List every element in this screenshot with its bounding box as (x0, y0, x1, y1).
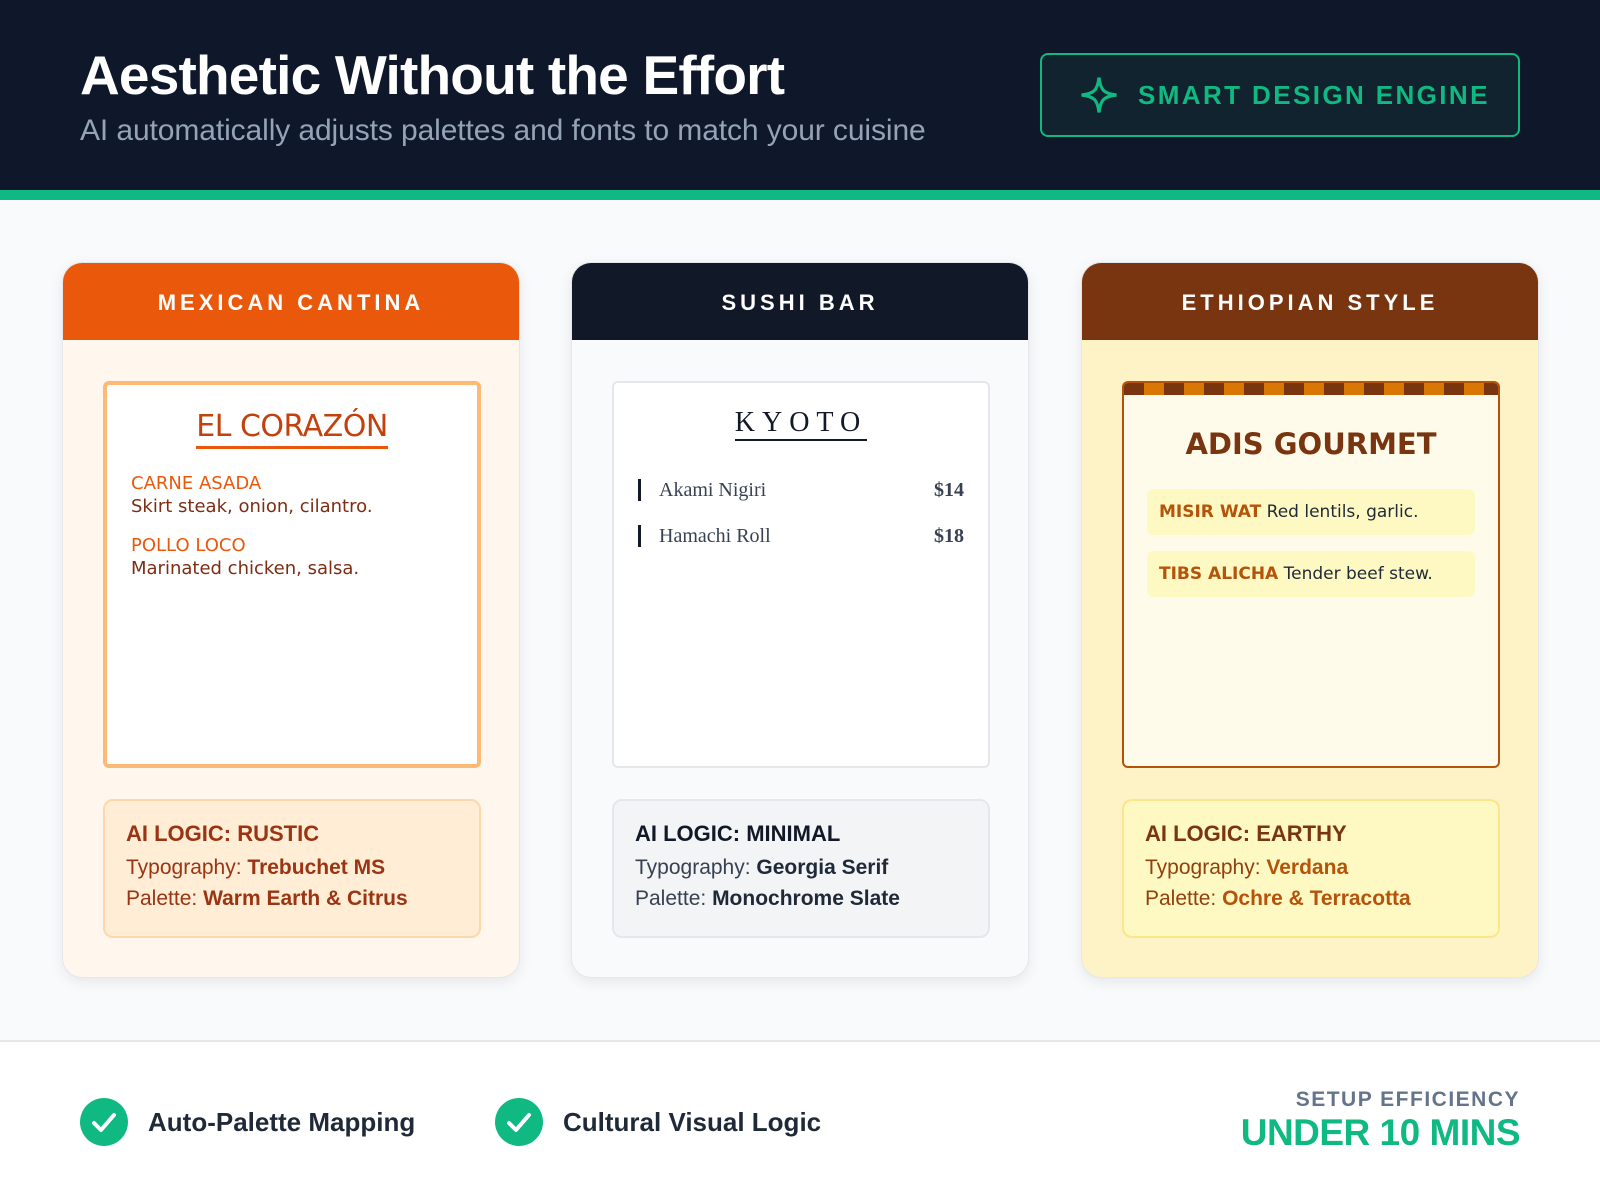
menu preview: el corazon: Marinated chicken, salsa. (131, 558, 359, 579)
feature: auto-palette mapping: Auto-Palette Mapping (148, 1106, 415, 1136)
menu preview: adis gourmet: TIBS ALICHA Tender beef stew. (1159, 564, 1433, 584)
badge: smart design engine (1040, 53, 1520, 137)
ai logic: minimal: AI LOGIC: MINIMAL (635, 821, 840, 846)
stat: setup efficiency (1241, 1088, 1520, 1153)
menu preview: el corazon: POLLO LOCO (131, 535, 246, 556)
feature: cultural visual logic (495, 1098, 821, 1146)
menu preview: kyoto: Akami Nigiri (659, 479, 766, 501)
stat: setup efficiency: UNDER 10 MINS (1241, 1112, 1520, 1153)
ai logic: earthy: Palette: Ochre & Terracotta (1145, 887, 1411, 910)
icon: sparkle (1081, 77, 1117, 113)
heading: mexican: MEXICAN CANTINA (158, 290, 424, 315)
menu preview: kyoto: $18 (934, 525, 964, 547)
heading: ethiopian: ETHIOPIAN STYLE (1182, 290, 1438, 315)
ai logic: rustic: Palette: Warm Earth & Citrus (126, 887, 408, 910)
subtitle: AI automatically adjusts palettes and fonts to match your cuisine (80, 114, 926, 147)
menu preview: el corazon: CARNE ASADA (131, 473, 261, 494)
ai logic: minimal (612, 799, 990, 938)
badge: smart design engine: SMART DESIGN ENGINE (1138, 80, 1490, 110)
ai logic: earthy (1122, 799, 1500, 938)
panel: mexican cantina (62, 262, 520, 978)
icon: check (80, 1098, 128, 1146)
header (0, 0, 1600, 200)
ai logic: earthy: Typography: Verdana (1145, 856, 1348, 879)
icon: check (495, 1098, 543, 1146)
ai logic: earthy: AI LOGIC: EARTHY (1145, 821, 1347, 846)
menu preview: kyoto: KYOTO (735, 407, 867, 438)
feature: auto-palette mapping (80, 1098, 415, 1146)
menu preview: kyoto: $14 (934, 479, 964, 501)
menu preview: kyoto (612, 381, 990, 768)
panel: sushi bar (571, 262, 1029, 978)
title: Aesthetic Without the Effort (80, 44, 784, 106)
menu preview: el corazon: EL CORAZÓN (196, 409, 388, 444)
footer (0, 1040, 1600, 1200)
menu preview: el corazon (103, 381, 481, 768)
heading: sushi: SUSHI BAR (721, 290, 878, 315)
menu preview: adis gourmet: MISIR WAT Red lentils, garlic. (1159, 502, 1418, 522)
heading: ethiopian (1082, 263, 1538, 340)
ai logic: rustic: Typography: Trebuchet MS (126, 856, 385, 879)
ai logic: rustic (103, 799, 481, 938)
ai logic: rustic: AI LOGIC: RUSTIC (126, 821, 319, 846)
heading: mexican (63, 263, 519, 340)
menu preview: adis gourmet: ADIS GOURMET (1185, 427, 1437, 461)
stat: setup efficiency: SETUP EFFICIENCY (1296, 1088, 1520, 1111)
menu preview: kyoto: Hamachi Roll (659, 525, 771, 547)
menu preview: adis gourmet (1122, 381, 1500, 768)
feature: cultural visual logic: Cultural Visual Logic (563, 1106, 821, 1136)
panel: ethiopian style (1081, 262, 1539, 978)
menu preview: el corazon: Skirt steak, onion, cilantro. (131, 496, 373, 517)
heading: sushi (572, 263, 1028, 340)
ai logic: minimal: Typography: Georgia Serif (635, 856, 888, 879)
ai logic: minimal: Palette: Monochrome Slate (635, 887, 900, 910)
